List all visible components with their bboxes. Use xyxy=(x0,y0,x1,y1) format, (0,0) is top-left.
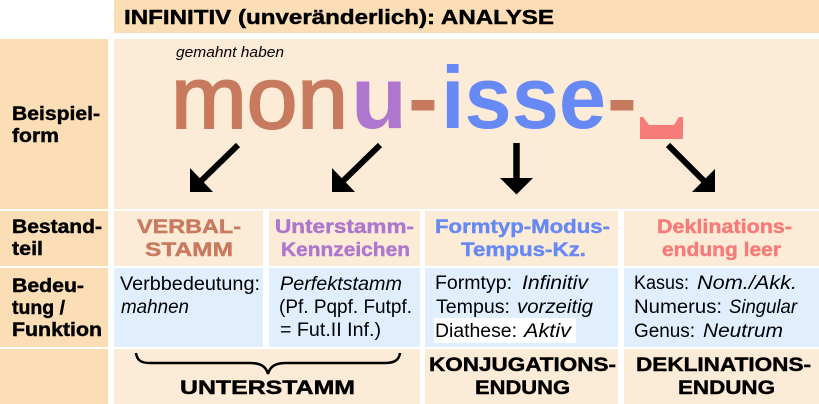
panel: row label Bedeutung / Funktion: Funktion xyxy=(12,320,102,341)
panel: row label Beispielform: form xyxy=(12,126,59,147)
panel: component Verbalstamm: VERBAL- xyxy=(137,217,241,238)
panel: Konjugationsendung group: KONJUGATIONS- xyxy=(429,355,616,376)
panel: meaning of conjugation marker: Aktiv xyxy=(523,321,573,342)
panel: Deklinationsendung group: ENDUNG xyxy=(678,378,775,399)
panel: meaning of substem marker xyxy=(269,268,420,347)
panel: meaning of verb stem xyxy=(114,268,263,347)
panel: component Verbalstamm: STAMM xyxy=(145,240,233,261)
panel: component Formtyp-Modus-Tempus-Kz.: Formtyp-Modus- xyxy=(435,217,610,238)
panel: meaning of substem marker: Perfektstamm xyxy=(280,274,402,295)
panel: component Unterstamm-Kennzeichen xyxy=(269,211,420,266)
panel: Konjugationsendung group xyxy=(425,349,618,404)
panel: row label Bestandteil: Bestand- xyxy=(12,217,102,238)
panel: meaning of verb stem: mahnen xyxy=(121,297,189,318)
panel: meaning of conjugation marker: Infinitiv xyxy=(522,273,590,294)
panel: Unterstamm group: UNTERSTAMM xyxy=(180,378,355,399)
word part: ending isse: isse xyxy=(441,48,606,147)
panel: component Formtyp-Modus-Tempus-Kz. xyxy=(425,211,618,266)
panel: row label Bedeutung / Funktion: Bedeu- xyxy=(12,276,84,297)
panel: example form xyxy=(114,39,819,209)
panel: meaning of conjugation marker: Formtyp: xyxy=(435,273,512,294)
panel: meaning of declension ending: Neutrum xyxy=(703,321,783,342)
panel: component Deklinationsendung: Deklinations- xyxy=(657,217,792,238)
panel: row label Bedeutung / Funktion: tung / xyxy=(12,298,66,319)
panel: meaning of conjugation marker: Diathese: xyxy=(435,321,517,342)
panel: meaning of verb stem: Verbbedeutung: xyxy=(120,274,260,295)
panel: row label Bestandteil xyxy=(0,211,108,266)
panel: meaning of declension ending: Kasus: xyxy=(634,273,689,294)
translation gloss: gemahnt haben xyxy=(176,44,284,61)
panel: Deklinationsendung group: DEKLINATIONS- xyxy=(636,355,811,376)
panel: meaning of substem marker: = Fut.II Inf.) xyxy=(280,320,381,341)
word part: verb stem mon: mon xyxy=(171,48,348,147)
empty declension ending mark xyxy=(640,117,683,139)
arrow: to Unterstamm-Kennzeichen xyxy=(332,145,380,192)
arrow: to Deklinationsendung xyxy=(668,145,715,192)
panel: component Verbalstamm xyxy=(114,211,263,266)
hyphen: - xyxy=(607,48,637,147)
panel: component Formtyp-Modus-Tempus-Kz.: Tempus-Kz. xyxy=(461,240,586,261)
panel: meaning of conjugation marker: vorzeitig xyxy=(517,297,593,318)
hyphen: - xyxy=(408,48,438,147)
panel: Unterstamm group xyxy=(114,349,420,404)
panel: component Deklinationsendung xyxy=(624,211,819,266)
panel: component Deklinationsendung: endung leer xyxy=(662,240,782,261)
panel: meaning of declension ending xyxy=(624,268,819,347)
panel: meaning of declension ending: Nom./Akk. xyxy=(697,273,797,294)
panel: meaning of declension ending: Genus: xyxy=(634,321,695,342)
panel: meaning of substem marker: (Pf. Pqpf. Futpf. xyxy=(279,297,412,318)
panel: row label Beispielform xyxy=(0,39,108,209)
panel: component Unterstamm-Kennzeichen: Unterstamm- xyxy=(275,217,414,238)
panel: row label Beispielform: Beispiel- xyxy=(12,104,100,125)
panel: meaning of conjugation marker xyxy=(425,268,618,347)
panel: meaning of conjugation marker: Tempus: xyxy=(436,297,510,318)
arrow: to Verbalstamm xyxy=(190,145,238,192)
panel: row label Bestandteil: teil xyxy=(12,239,43,260)
panel: meaning of declension ending: Numerus: xyxy=(634,297,722,318)
panel: empty row label xyxy=(0,349,108,404)
panel: Konjugationsendung group: ENDUNG xyxy=(475,378,570,399)
panel: title bar xyxy=(114,0,819,33)
brace xyxy=(136,353,400,374)
panel: Deklinationsendung group xyxy=(624,349,819,404)
panel: row label Bedeutung / Funktion xyxy=(0,268,108,347)
arrow: to Formtyp-Modus-Tempus-Kz. xyxy=(500,143,533,194)
title: INFINITIV (unveränderlich): ANALYSE xyxy=(124,7,554,29)
panel: meaning of declension ending: Singular xyxy=(729,297,798,318)
panel: component Unterstamm-Kennzeichen: Kennzeichen xyxy=(281,240,410,261)
word part: substem marker u: u xyxy=(351,48,407,147)
